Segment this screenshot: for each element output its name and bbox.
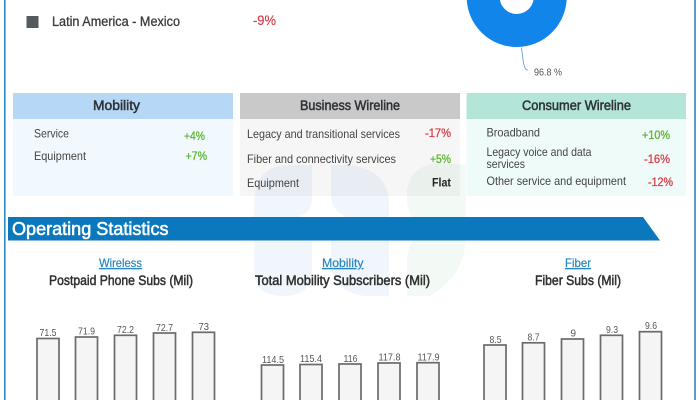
chart: Total Mobility Subscribers: 115.4 bbox=[300, 353, 322, 365]
chart: Postpaid Phone Subs: 72.7 bbox=[156, 322, 173, 334]
chart: Total Mobility Subscribers: 114.5 bbox=[262, 354, 284, 366]
chart: Postpaid Phone Subs: 71.9 bbox=[78, 326, 95, 338]
chart: Fiber Subs: Fiber Subs (Mil) bbox=[535, 273, 621, 288]
Business Wireline text: +5% bbox=[430, 152, 451, 166]
chart: Total Mobility Subscribers: 117.8 bbox=[378, 352, 401, 364]
section banner: Operating Statistics bbox=[8, 217, 660, 240]
Consumer Wireline text: Broadband bbox=[486, 126, 540, 140]
panel: Business Wireline background bbox=[240, 93, 460, 196]
Consumer Wireline text: -12% bbox=[648, 175, 673, 189]
legend row: Latin America - Mexico: Latin America - Mexico bbox=[52, 14, 180, 29]
legend row: Latin America - Mexico bbox=[26, 13, 276, 29]
panel: Consumer Wireline background bbox=[466, 93, 686, 196]
right frame border bbox=[694, 0, 696, 400]
chart: Fiber Subs: 9 bbox=[570, 328, 576, 340]
Mobility text: Equipment bbox=[34, 149, 87, 163]
Business Wireline text: Legacy and transitional services bbox=[247, 127, 400, 141]
Consumer Wireline text: -16% bbox=[644, 152, 670, 166]
chart: Fiber Subs: 8.5 bbox=[490, 334, 502, 346]
chart: Total Mobility Subscribers: Total Mobility Subscribers (Mil) bbox=[255, 273, 430, 288]
chart: Total Mobility Subscribers bbox=[255, 256, 440, 400]
Mobility text: Service bbox=[34, 126, 69, 140]
chart: Postpaid Phone Subs: Postpaid Phone Subs (Mil) bbox=[49, 273, 193, 288]
chart: Total Mobility Subscribers: 117.9 bbox=[418, 352, 440, 364]
chart: Postpaid Phone Subs bbox=[37, 256, 214, 400]
Mobility text: +4% bbox=[184, 129, 205, 143]
Consumer Wireline text: Other service and equipment bbox=[486, 174, 627, 188]
Mobility text: +7% bbox=[186, 149, 207, 163]
watermark logo bbox=[254, 163, 466, 296]
Mobility text: Mobility bbox=[93, 98, 140, 113]
Consumer Wireline text: Consumer Wireline bbox=[522, 98, 631, 113]
chart: Postpaid Phone Subs: 72.2 bbox=[117, 324, 134, 336]
Business Wireline text: -17% bbox=[425, 126, 451, 140]
Business Wireline text: Fiber and connectivity services bbox=[247, 152, 396, 166]
Consumer Wireline text bbox=[486, 98, 673, 189]
chart: Postpaid Phone Subs: Wireless bbox=[99, 256, 142, 270]
chart: Fiber Subs: Fiber bbox=[565, 256, 591, 270]
chart: Total Mobility Subscribers: Mobility bbox=[322, 256, 364, 270]
Business Wireline text: Business Wireline bbox=[300, 98, 400, 113]
chart: Postpaid Phone Subs: 71.5 bbox=[40, 327, 57, 339]
section banner: Operating Statistics: Operating Statistics bbox=[12, 219, 168, 239]
Consumer Wireline text: Legacy voice and data bbox=[486, 145, 592, 159]
Consumer Wireline text: services bbox=[486, 157, 525, 171]
donut chart: 96.8 % bbox=[534, 66, 562, 78]
chart: Fiber Subs: 9.3 bbox=[606, 324, 618, 336]
left frame border bbox=[4, 0, 6, 400]
Consumer Wireline text: +10% bbox=[642, 128, 670, 142]
chart: Total Mobility Subscribers: 116 bbox=[344, 353, 358, 365]
chart: Fiber Subs: 8.7 bbox=[528, 332, 540, 344]
chart: Fiber Subs bbox=[484, 256, 662, 400]
Business Wireline text bbox=[247, 98, 451, 190]
panel: Mobility background bbox=[13, 93, 233, 196]
chart: Postpaid Phone Subs: 73 bbox=[198, 321, 209, 333]
Business Wireline text: Equipment bbox=[247, 176, 300, 190]
Mobility text bbox=[34, 98, 207, 163]
Business Wireline text: Flat bbox=[432, 176, 451, 190]
legend row: Latin America - Mexico: -9% bbox=[253, 13, 276, 28]
chart: Fiber Subs: 9.6 bbox=[645, 320, 657, 332]
donut chart bbox=[483, 0, 562, 78]
